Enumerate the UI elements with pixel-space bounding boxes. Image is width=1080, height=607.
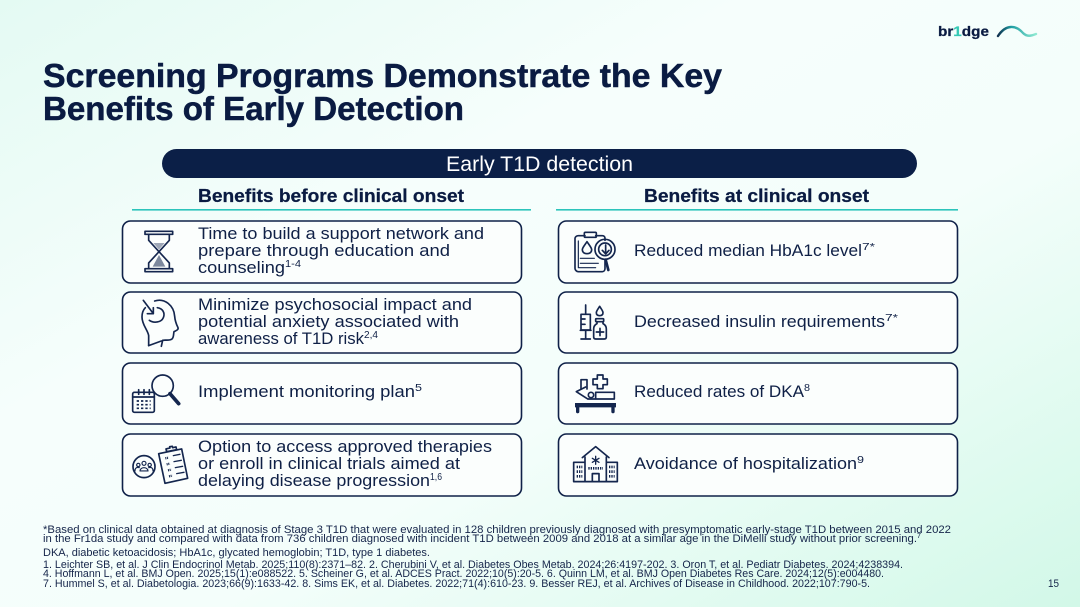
text: HbA1c level: Reduced median HbA1c level — [634, 241, 862, 260]
panel: psychosocial impact — [122, 292, 522, 353]
text: hospitalization: 9 — [857, 455, 865, 466]
banner: Early T1D detection — [162, 149, 917, 178]
panel: monitoring plan — [122, 363, 522, 424]
abbreviations: DKA, diabetic ketoacidosis; HbA1c, glycated hemoglobin; T1D, type 1 diabetes. — [43, 547, 430, 559]
text: approved therapies — [198, 437, 492, 490]
text: psychosocial impact: 2,4 — [364, 330, 378, 341]
footnote: 7 — [917, 533, 921, 540]
page number: 15 — [1048, 578, 1059, 590]
heading: benefits before clinical onset: Benefits before clinical onset — [198, 186, 464, 206]
references: 7. Hummel S, et al. Diabetologia. 2023;66(9):1633-42. 8. Sims EK, et al. Diabetes. 2022;71(4):610-23. 9. Besser REJ, et al. Archives of Disease in Childhood. 2022;107:790-5. — [43, 578, 870, 590]
icon: hospital building — [574, 447, 617, 482]
icon: calendar and magnifier — [133, 375, 179, 412]
icon: syringe and vial — [580, 305, 606, 339]
footnote: in the Fr1da study and compared with data from 736 children diagnosed with incident T1D between 2009 and 2018 at a similar age in the DiMelli study without prior screening. — [43, 533, 917, 545]
text: HbA1c level: 7* — [862, 242, 875, 253]
panel: support network — [122, 221, 522, 283]
text: approved therapies: Option to access approved therapies — [198, 437, 492, 456]
references: 1. Leichter SB, et al. J Clin Endocrinol Metab. 2025;110(8):2371–82. 2. Cherubini V, et al. Diabetes Obes Metab. 2024;26:4197-202. 3. Oron T, et al. Pediatr Diabetes. 2024;4238394. — [43, 559, 903, 571]
footnote — [43, 524, 951, 545]
text: support network: prepare through education and — [198, 241, 450, 260]
icon: hourglass — [145, 231, 173, 272]
text: monitoring plan: Implement monitoring plan — [198, 382, 415, 401]
panel: rates of DKA — [558, 363, 958, 424]
text: support network — [198, 224, 484, 277]
text: rates of DKA: 8 — [804, 383, 810, 394]
heading: benefits at clinical onset: Benefits at clinical onset — [644, 186, 869, 206]
references — [43, 559, 903, 590]
title — [43, 57, 723, 127]
text: psychosocial impact — [198, 295, 472, 348]
title: Benefits of Early Detection — [43, 90, 464, 127]
text: insulin requirements: Decreased insulin requirements — [634, 312, 885, 331]
panel: insulin requirements — [558, 292, 958, 353]
text: hospitalization: Avoidance of hospitalization — [634, 454, 857, 473]
text: approved therapies: delaying disease progression — [198, 471, 430, 490]
icon: hospital bed — [575, 375, 616, 412]
text: insulin requirements: 7* — [885, 313, 898, 324]
text: support network: counseling — [198, 258, 285, 277]
text: approved therapies: or enroll in clinical trials aimed at — [198, 454, 460, 473]
logo: bridge — [938, 23, 1036, 39]
icon: head with arrow — [142, 300, 178, 346]
text: monitoring plan: 5 — [415, 383, 423, 394]
text: support network: Time to build a support network and — [198, 224, 484, 243]
text: psychosocial impact: awareness of T1D risk — [198, 329, 364, 348]
icon: clipboard with magnifier — [575, 232, 615, 272]
icon: people and clipboard — [133, 446, 188, 483]
banner: Early T1D detection: Early T1D detection — [446, 153, 633, 176]
panel: hospitalization — [558, 434, 958, 496]
text: rates of DKA: Reduced rates of DKA — [634, 382, 805, 401]
footnote: *Based on clinical data obtained at diagnosis of Stage 3 T1D that were evaluated in 128 children previously diagnosed with presymptomatic early-stage T1D between 2015 and 2022 — [43, 524, 951, 536]
text: support network: 1-4 — [285, 259, 301, 270]
title: Screening Programs Demonstrate the Key — [43, 57, 723, 94]
text: psychosocial impact: potential anxiety associated with — [198, 312, 459, 331]
panel: HbA1c level — [558, 221, 958, 283]
text: psychosocial impact: Minimize psychosocial impact and — [198, 295, 472, 314]
references: 4. Hoffmann L, et al. BMJ Open. 2025;15(1):e088522. 5. Scheiner G, et al. ADCES Pract. 2022;10(5):20-5. 6. Quinn LM, et al. BMJ Open Diabetes Res Care. 2024;12(5):e004480. — [43, 568, 884, 580]
logo: bridge: br1dge — [938, 23, 989, 39]
text: approved therapies: 1,6 — [430, 472, 442, 483]
panel: approved therapies — [122, 434, 522, 496]
